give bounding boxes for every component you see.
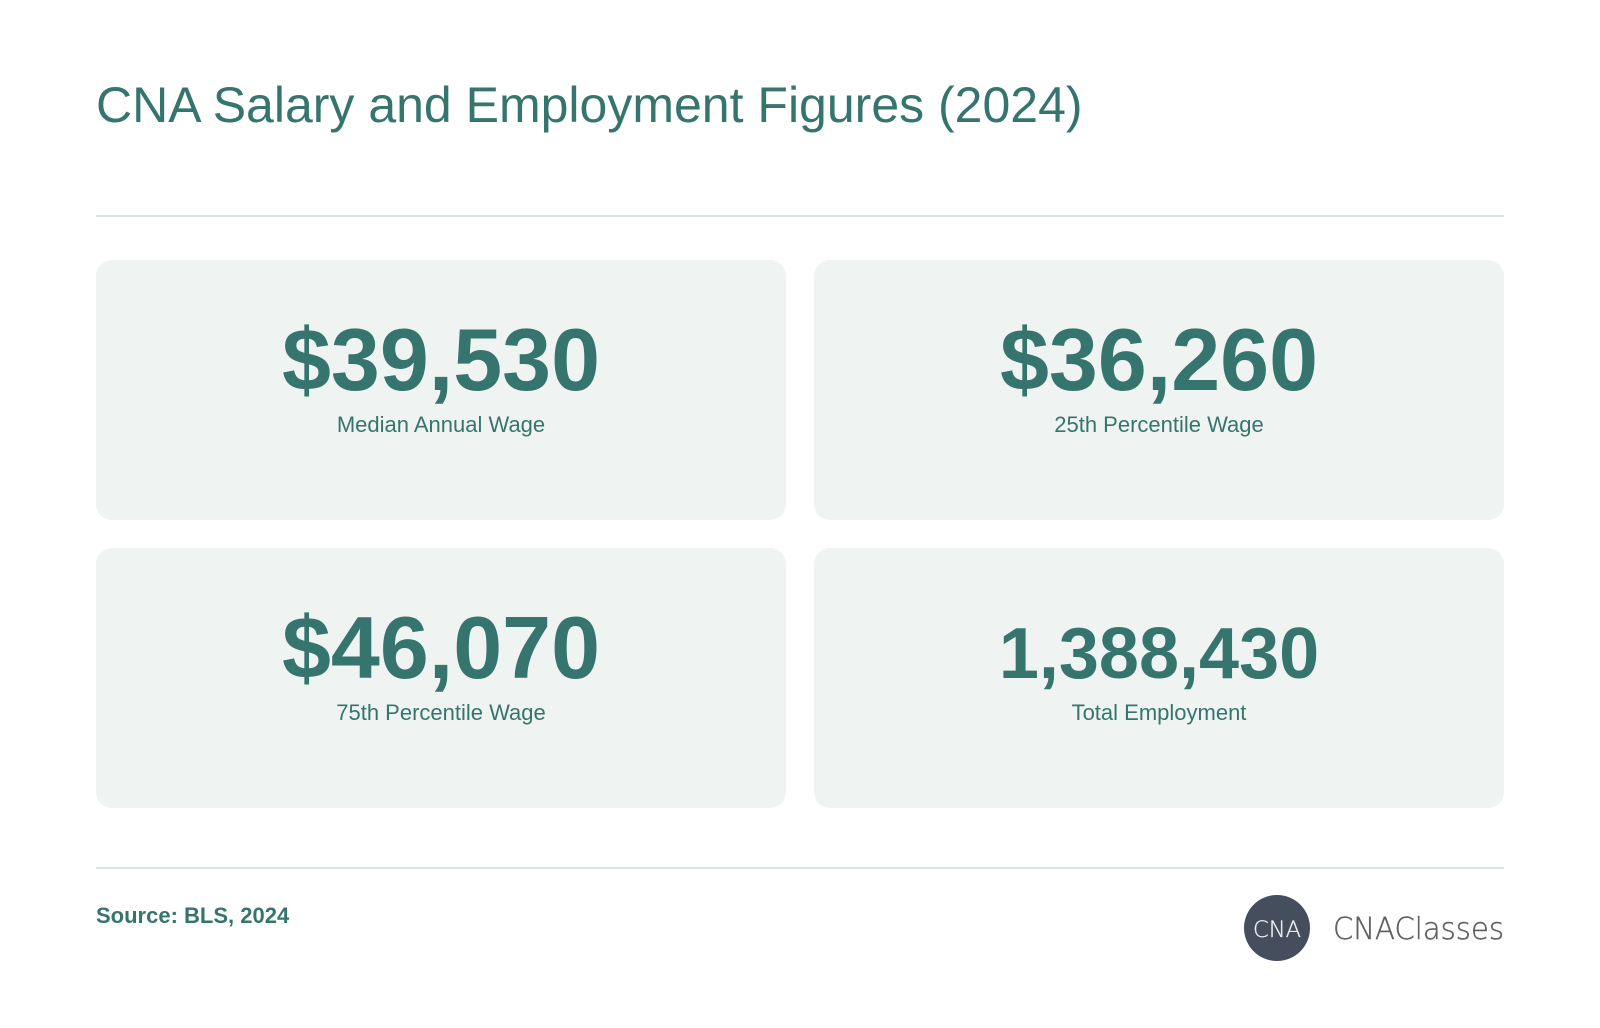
title: CNA Salary and Employment Figures (2024) bbox=[96, 77, 1083, 133]
icon: CNA circle badge: CNA bbox=[1253, 918, 1301, 943]
icon: CNA circle badge bbox=[1244, 895, 1310, 961]
panel: median annual wage bbox=[96, 260, 786, 520]
stat label: 75th percentile: 75th Percentile Wage bbox=[336, 700, 546, 725]
panel: total employment bbox=[814, 548, 1504, 808]
panel: 25th percentile wage bbox=[814, 260, 1504, 520]
stat label: total employment: Total Employment bbox=[1072, 700, 1246, 725]
stat label: 25th percentile: 25th Percentile Wage bbox=[1054, 412, 1264, 437]
stat value: 25th percentile: $36,260 bbox=[1000, 310, 1318, 409]
stat label: median wage: Median Annual Wage bbox=[337, 412, 545, 437]
source note: Source: BLS, 2024 bbox=[96, 903, 289, 928]
stat value: 75th percentile: $46,070 bbox=[282, 598, 600, 697]
stat value: median wage: $39,530 bbox=[282, 310, 600, 409]
stat value: total employment: 1,388,430 bbox=[999, 614, 1319, 694]
logo: CNAClasses bbox=[1244, 895, 1504, 961]
panel: 75th percentile wage bbox=[96, 548, 786, 808]
